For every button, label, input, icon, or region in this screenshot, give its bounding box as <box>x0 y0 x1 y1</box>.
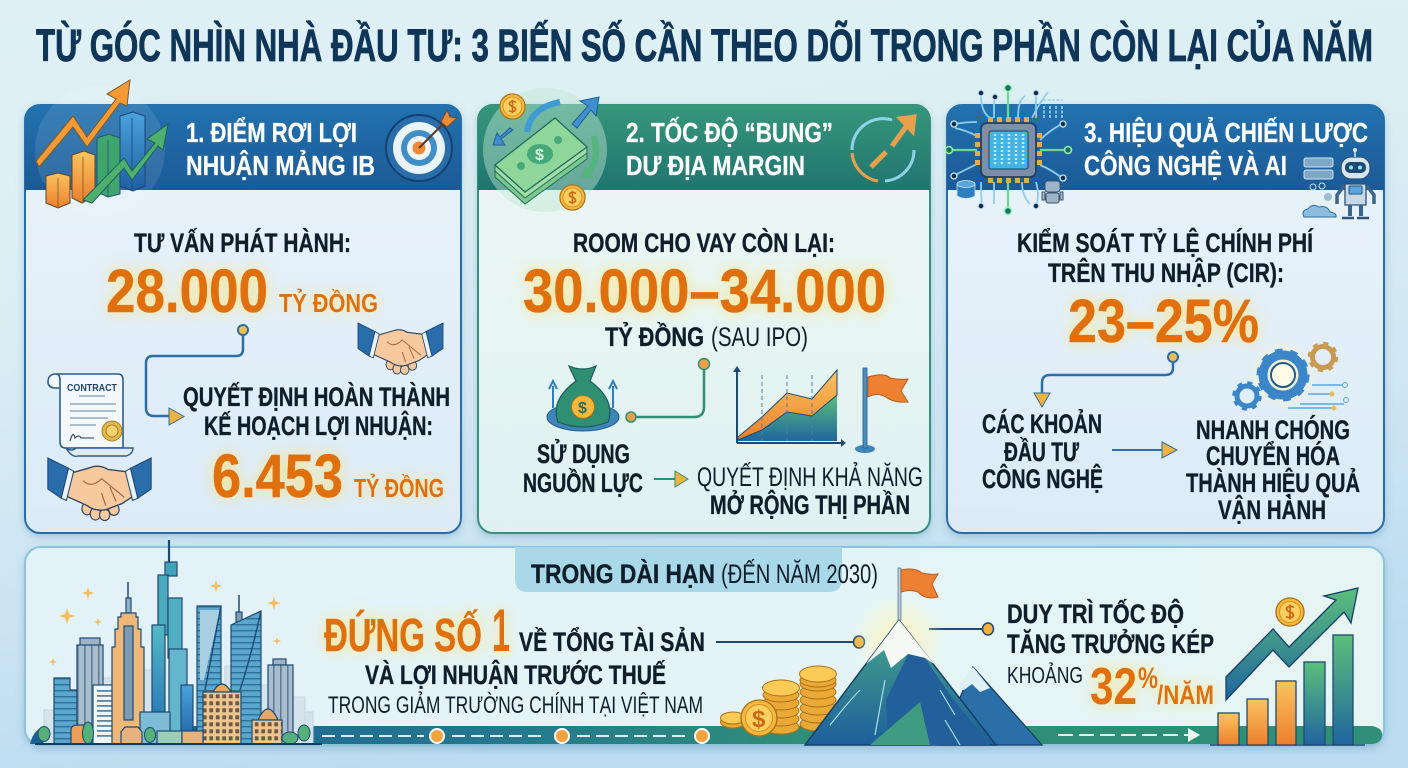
label: sử dụng nguồn lực: NGUỒN LỰC <box>523 468 643 498</box>
label: nhanh chóng chuyển hóa: CHUYỂN HÓA <box>1206 441 1340 471</box>
heading: 1. ĐIỂM RƠI LỢI <box>186 117 357 148</box>
panel: hiệu quả chiến lược công nghệ và AI <box>946 84 1384 533</box>
panel 1 header band <box>25 105 461 190</box>
bar chart with growth arrow <box>1210 588 1365 745</box>
icon: handshake top right <box>358 323 443 374</box>
value: 28.000 tỷ đồng: TỶ ĐỒNG <box>279 288 378 318</box>
label: tư vấn phát hành: TƯ VẤN PHÁT HÀNH: <box>134 228 351 258</box>
icon: contract: CONTRACT <box>67 382 117 394</box>
unit: tỷ đồng sau IPO: TỶ ĐỒNG <box>605 322 704 352</box>
icon: flag <box>855 368 908 453</box>
heading: CÔNG NGHỆ VÀ AI <box>1084 149 1287 181</box>
value: 23–25%: 23–25% <box>1068 287 1259 355</box>
text: về tổng tài sản và lợi nhuận trước thuế: VÀ LỢI NHUẬN TRƯỚC THUẾ <box>365 660 666 690</box>
label: room cho vay: ROOM CHO VAY CÒN LẠI: <box>573 228 835 258</box>
tab: trong dài hạn: TRONG DÀI HẠN <box>531 559 715 589</box>
icon: contract <box>48 374 133 456</box>
heading: NHUẬN MẢNG IB <box>186 149 375 181</box>
value: 32%/năm <box>1090 658 1214 716</box>
text: về tổng tài sản và lợi nhuận trước thuế: VỀ TỔNG TÀI SẢN <box>519 627 705 657</box>
value: 28.000 tỷ đồng <box>106 257 378 325</box>
icon: money bag <box>547 366 619 431</box>
value: 32%/năm: % <box>1138 662 1158 695</box>
icon: target with arrow <box>386 110 457 181</box>
label: nhanh chóng chuyển hóa: NHANH CHÓNG <box>1196 415 1350 445</box>
label: quyết định khả năng mở rộng thị phần: QUYẾT ĐỊNH KHẢ NĂNG <box>697 462 923 492</box>
icon: coin stacks <box>720 666 836 736</box>
panel 1 card <box>25 105 461 533</box>
panel 2 header band <box>478 105 930 190</box>
panel 2 card <box>478 105 930 533</box>
icon: money stack with arrows and coins <box>483 88 607 212</box>
label: nhanh chóng chuyển hóa: VẬN HÀNH <box>1218 495 1326 525</box>
icon: handshake bottom left <box>48 458 151 521</box>
arrow connector <box>146 325 248 425</box>
tab: trong dài hạn <box>515 547 878 592</box>
label: các khoản đầu tư công nghệ: CÁC KHOẢN <box>982 409 1102 439</box>
connector to peak right <box>929 623 994 635</box>
heading: 2. TỐC ĐỘ “BUNG” <box>626 116 833 148</box>
icon: rising bar chart with arrows <box>35 80 168 215</box>
label: quyết định hoàn thành <box>183 382 450 441</box>
label: quyết định hoàn thành: KẾ HOẠCH LỢI NHUẬN: <box>204 411 433 441</box>
connector <box>1034 352 1178 407</box>
area chart <box>733 366 846 447</box>
panel: điểm rơi lợi nhuận mảng IB <box>25 80 461 533</box>
value: 6.453 tỷ đồng <box>212 442 444 510</box>
arrow <box>1112 442 1177 458</box>
heading <box>1084 116 1368 181</box>
text: về tổng tài sản và lợi nhuận trước thuế <box>328 627 705 719</box>
tab: trong dài hạn: (ĐẾN NĂM 2030) <box>721 559 878 589</box>
value: 30.000–34.000: 30.000–34.000 <box>523 257 886 325</box>
panel: tốc độ bung dư địa margin <box>478 88 930 533</box>
icon: money bag: $ <box>578 400 587 417</box>
label: quyết định khả năng mở rộng thị phần: MỞ RỘNG THỊ PHẦN <box>710 490 910 520</box>
claim: đứng số 1: 1 <box>492 597 510 664</box>
label: nhanh chóng chuyển hóa <box>1186 415 1360 525</box>
value: 28.000 tỷ đồng: 28.000 <box>106 257 268 325</box>
claim: đứng số 1 <box>324 597 510 664</box>
value: 6.453 tỷ đồng: 6.453 <box>212 442 343 510</box>
claim: đứng số 1: ĐỨNG SỐ <box>324 609 482 661</box>
arrow <box>654 471 688 487</box>
label: các khoản đầu tư công nghệ: CÔNG NGHỆ <box>982 464 1103 494</box>
label: kiểm soát CIR: KIỂM SOÁT TỶ LỆ CHÍNH PHÍ <box>1017 228 1313 258</box>
heading <box>186 117 375 181</box>
icon: expansion arrow ring <box>852 116 915 181</box>
label: sử dụng nguồn lực: SỬ DỤNG <box>537 439 630 469</box>
illustration: city skyline <box>35 540 322 744</box>
label: các khoản đầu tư công nghệ <box>982 409 1103 494</box>
timeline road <box>30 726 1382 744</box>
value: 32%/năm: /NĂM <box>1157 679 1214 710</box>
heading <box>626 116 833 181</box>
icon: gears <box>1234 339 1348 411</box>
panel: trong dài hạn đến năm 2030 <box>25 540 1384 745</box>
text: duy trì tốc độ tăng trưởng kép: TĂNG TRƯỞNG KÉP <box>1007 629 1214 659</box>
connector <box>626 358 710 422</box>
text: duy trì tốc độ tăng trưởng kép <box>1007 599 1214 688</box>
label: các khoản đầu tư công nghệ: ĐẦU TƯ <box>1004 437 1079 467</box>
connector to peak left <box>716 636 864 648</box>
label: kiểm soát CIR: TRÊN THU NHẬP (CIR): <box>1048 258 1284 288</box>
label: quyết định khả năng mở rộng thị phần <box>697 462 923 520</box>
icon: AI chip with circuit traces <box>946 84 1072 214</box>
text: duy trì tốc độ tăng trưởng kép: DUY TRÌ TỐC ĐỘ <box>1007 599 1184 629</box>
text: duy trì tốc độ tăng trưởng kép: KHOẢNG <box>1007 660 1083 688</box>
icon: coin stacks: $ <box>752 706 766 733</box>
label: quyết định hoàn thành: QUYẾT ĐỊNH HOÀN THÀNH <box>183 382 450 412</box>
heading: DƯ ĐỊA MARGIN <box>626 150 805 181</box>
label: sử dụng nguồn lực <box>523 439 643 498</box>
icon: money stack with arrows and coins: $ <box>535 147 544 164</box>
unit: tỷ đồng sau IPO <box>605 322 808 352</box>
value: 6.453 tỷ đồng: TỶ ĐỒNG <box>354 473 444 503</box>
bottom banner card <box>25 547 1384 745</box>
label: kiểm soát CIR <box>1017 228 1313 288</box>
unit: tỷ đồng sau IPO: (SAU IPO) <box>711 322 808 352</box>
value: 32%/năm: 32 <box>1090 658 1137 716</box>
icon: mountain with flag <box>805 568 1042 745</box>
icon: robot with servers and cloud <box>1303 148 1374 218</box>
panel 3 header band <box>947 105 1384 190</box>
text: về tổng tài sản và lợi nhuận trước thuế: TRONG GIẢM TRƯỜNG CHÍNH TẠI VIỆT NAM <box>328 690 703 719</box>
panel 3 card <box>947 105 1384 533</box>
